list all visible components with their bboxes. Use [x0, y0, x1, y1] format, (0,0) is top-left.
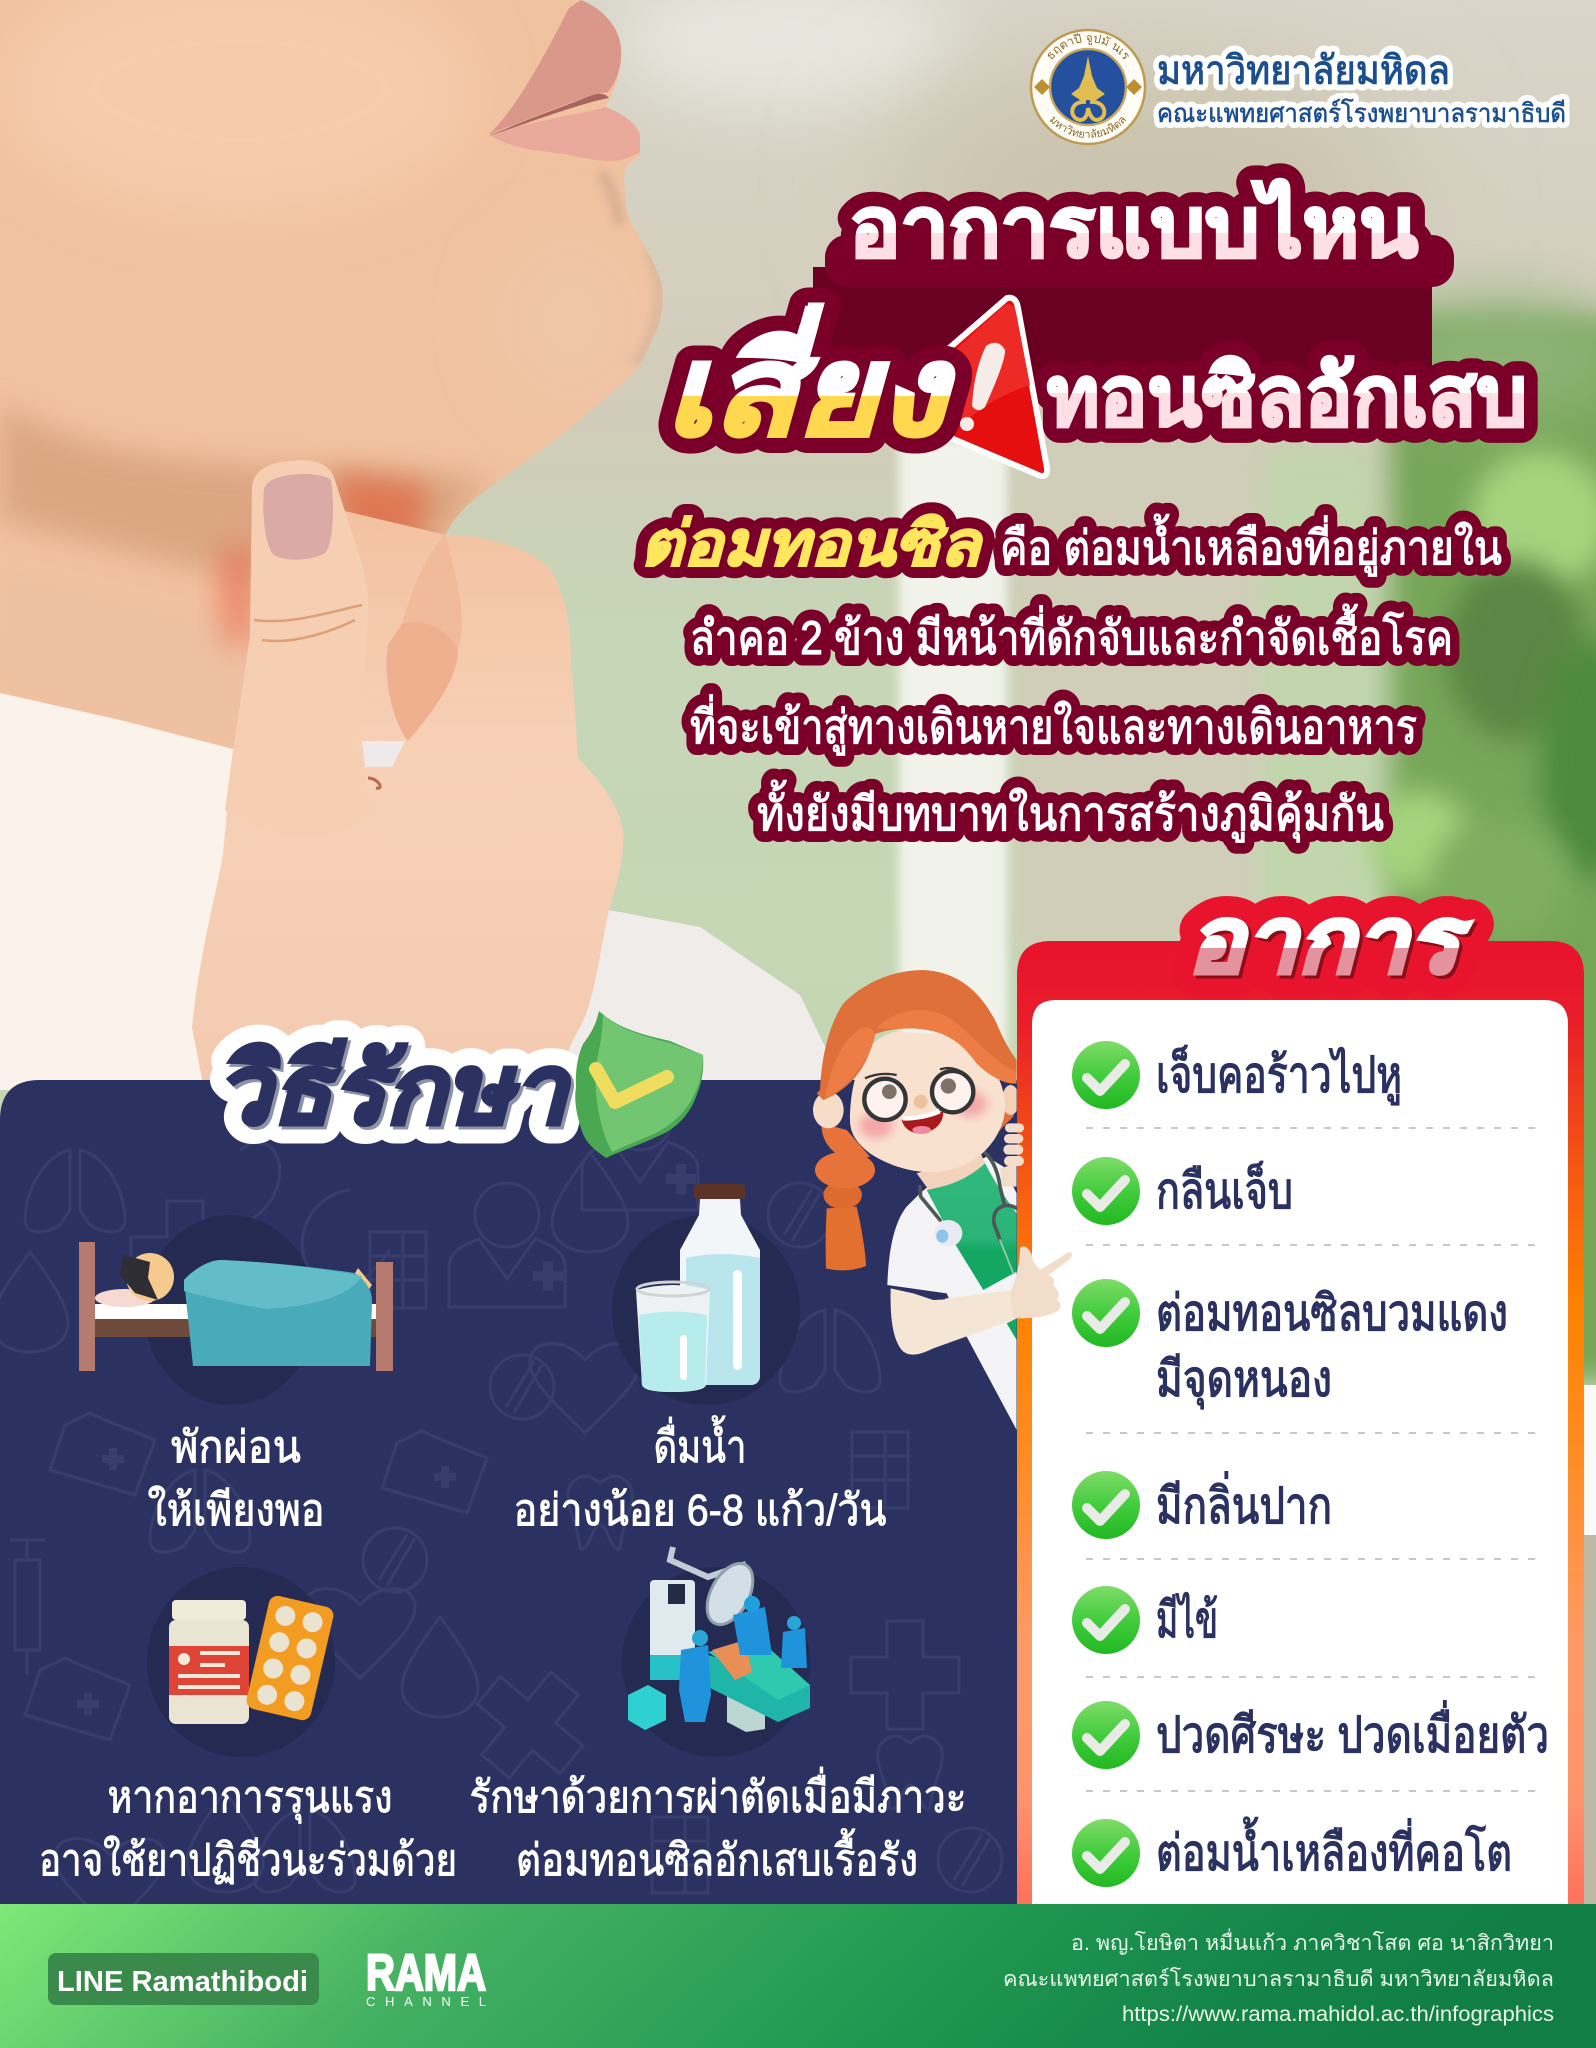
symptom 2: [1072, 1157, 1293, 1225]
footer band: [0, 1904, 1596, 2048]
label: drink water: ดื่มน้ำ: [654, 1415, 746, 1472]
title line 1: อาการแบบไหน: [849, 179, 1418, 274]
credit text: [1003, 1928, 1554, 2026]
glasses: [864, 1068, 973, 1120]
label: rest: [148, 1423, 324, 1535]
symptom 3: ต่อมทอนซิลบวมแดง: [1156, 1285, 1508, 1341]
treatment heading: วิธีรักษา: [215, 1035, 571, 1144]
pointing hand: [1010, 1246, 1072, 1318]
university logo: มหาวิทยาลัยมหิดล: [1050, 116, 1126, 138]
treatment heading: วิธีรักษา: [218, 1038, 574, 1147]
credit text: https://www.rama.mahidol.ac.th/infographics: [1122, 2003, 1554, 2026]
photo: face and neck: [0, 0, 663, 750]
cheeks: [859, 1113, 893, 1138]
symptom 7: ต่อมน้ำเหลืองที่คอโต: [1156, 1817, 1512, 1881]
symptoms heading: อาการ: [1187, 890, 1472, 992]
title line 1: อาการแบบไหน: [849, 179, 1418, 274]
RAMA channel logo: RAMA: [366, 1944, 486, 2001]
label: surgery: ต่อมทอนซิลอักเสบเรื้อรัง: [516, 1828, 918, 1885]
lips: [489, 0, 640, 161]
coat: [887, 1157, 1017, 1430]
nurse character: [813, 970, 1072, 1430]
university name: [1157, 49, 1566, 128]
university logo: [1030, 28, 1146, 146]
arm: [891, 1288, 1017, 1355]
description text: ต่อมทอนซิล: [640, 510, 983, 579]
symptom 1: [1072, 1041, 1402, 1109]
symptom 1: เจ็บคอร้าวไปหู: [1156, 1045, 1402, 1105]
title line 2: ทอนซิลอักเสบ: [1047, 349, 1527, 443]
description text: ลำคอ 2 ข้าง มีหน้าที่ดักจับและกำจัดเชื้อโรค: [690, 604, 1453, 664]
green scrub: [927, 1160, 1017, 1290]
symptom 2: กลืนเจ็บ: [1156, 1161, 1293, 1219]
university name: มหาวิทยาลัยมหิดล: [1157, 49, 1450, 93]
description text: ลำคอ 2 ข้าง มีหน้าที่ดักจับและกำจัดเชื้อโรค: [690, 604, 1453, 664]
nose: [914, 1095, 928, 1109]
neck: [917, 1152, 985, 1189]
hair and fringe: [817, 970, 1017, 1100]
mouth: [902, 1112, 943, 1133]
label: rest: พักผ่อน: [171, 1423, 301, 1472]
holding fingers: [1003, 1123, 1024, 1166]
symptom 6: [1072, 1701, 1549, 1769]
university logo: ธฤตาปี จูปมั นเร: [1048, 32, 1129, 60]
right strip below foliage: [1584, 1385, 1596, 1535]
description text: ที่จะเข้าสู่ทางเดินหายใจและทางเดินอาหาร: [690, 694, 1417, 756]
description text: ต่อมทอนซิล: [640, 510, 983, 579]
stethoscope: [920, 1148, 1017, 1273]
label: surgery: รักษาด้วยการผ่าตัดเมื่อมีภาวะ: [470, 1766, 966, 1822]
description text: คือ ต่อมน้ำเหลืองที่อยู่ภายใน: [1000, 514, 1502, 577]
label: antibiotics: อาจใช้ยาปฏิชีวนะร่วมด้วย: [39, 1835, 457, 1885]
symptom 7: [1072, 1817, 1512, 1887]
LINE badge: LINE Ramathibodi: [57, 1966, 308, 1998]
label: antibiotics: หากอาการรุนแรง: [108, 1773, 392, 1824]
university name: มหาวิทยาลัยมหิดล: [1157, 49, 1450, 93]
credit text: คณะแพทยศาสตร์โรงพยาบาลรามาธิบดี มหาวิทยาลัยมหิดล: [1003, 1967, 1554, 1991]
LINE badge: [48, 1953, 319, 2005]
university name: คณะแพทยศาสตร์โรงพยาบาลรามาธิบดี: [1157, 98, 1566, 128]
braid: [815, 1093, 1017, 1270]
label: drink water: [514, 1415, 886, 1535]
icon: water bottle and glass: [612, 1184, 800, 1405]
icon: red warning triangle: [880, 298, 1047, 476]
symptoms panel: [1017, 890, 1584, 1905]
face: [850, 1032, 1005, 1172]
symptom 5: [1072, 1586, 1218, 1654]
symptom 3: มีจุดหนอง: [1156, 1351, 1332, 1409]
treatment heading: วิธีรักษา: [215, 1035, 571, 1144]
icon: rest in bed: [79, 1215, 393, 1405]
symptoms heading: อาการ: [1190, 893, 1475, 995]
description text: ทั้งยังมีบทบาทในการสร้างภูมิคุ้มกัน: [757, 780, 1384, 843]
icon: medicine bottle and blister pack: [147, 1567, 335, 1757]
label: rest: ให้เพียงพอ: [148, 1485, 324, 1535]
icon: exclamation mark: [960, 343, 1005, 431]
title word: risk: เสี่ยง: [665, 304, 956, 461]
description text: ที่จะเข้าสู่ทางเดินหายใจและทางเดินอาหาร: [690, 694, 1417, 756]
description text: ทั้งยังมีบทบาทในการสร้างภูมิคุ้มกัน: [757, 780, 1384, 843]
symptom 4: [1072, 1471, 1332, 1539]
credit text: อ. พญ.โยษิตา หมื่นแก้ว ภาควิชาโสต ศอ นาสิกวิทยา: [1071, 1928, 1554, 1955]
title line 2: ทอนซิลอักเสบ: [1047, 349, 1527, 443]
symptom 5: มีไข้: [1156, 1592, 1218, 1648]
label: surgery: [470, 1766, 966, 1885]
ears: [813, 1092, 844, 1128]
symptom 3: [1072, 1279, 1508, 1409]
RAMA channel logo: CHANNEL: [366, 1994, 486, 2009]
symptoms heading: อาการ: [1187, 890, 1472, 992]
description text: คือ ต่อมน้ำเหลืองที่อยู่ภายใน: [1000, 514, 1502, 577]
description text: [640, 510, 1502, 843]
icon: green shield with check: [575, 1011, 703, 1158]
university name: คณะแพทยศาสตร์โรงพยาบาลรามาธิบดี: [1157, 98, 1566, 128]
photo: hand with thumb on throat: [192, 460, 623, 1095]
icon: surgery room: [622, 1547, 810, 1757]
label: antibiotics: [39, 1773, 457, 1885]
label: drink water: อย่างน้อย 6-8 แก้ว/วัน: [514, 1486, 886, 1535]
background medical pattern: [0, 1086, 1002, 1928]
symptom 4: มีกลิ่นปาก: [1156, 1472, 1332, 1534]
photo: sweater and shoulder: [0, 693, 846, 1090]
title word: risk: เสี่ยง: [665, 304, 956, 461]
navy treatment panel: [0, 1080, 1017, 1928]
title backdrop: [813, 235, 1454, 387]
